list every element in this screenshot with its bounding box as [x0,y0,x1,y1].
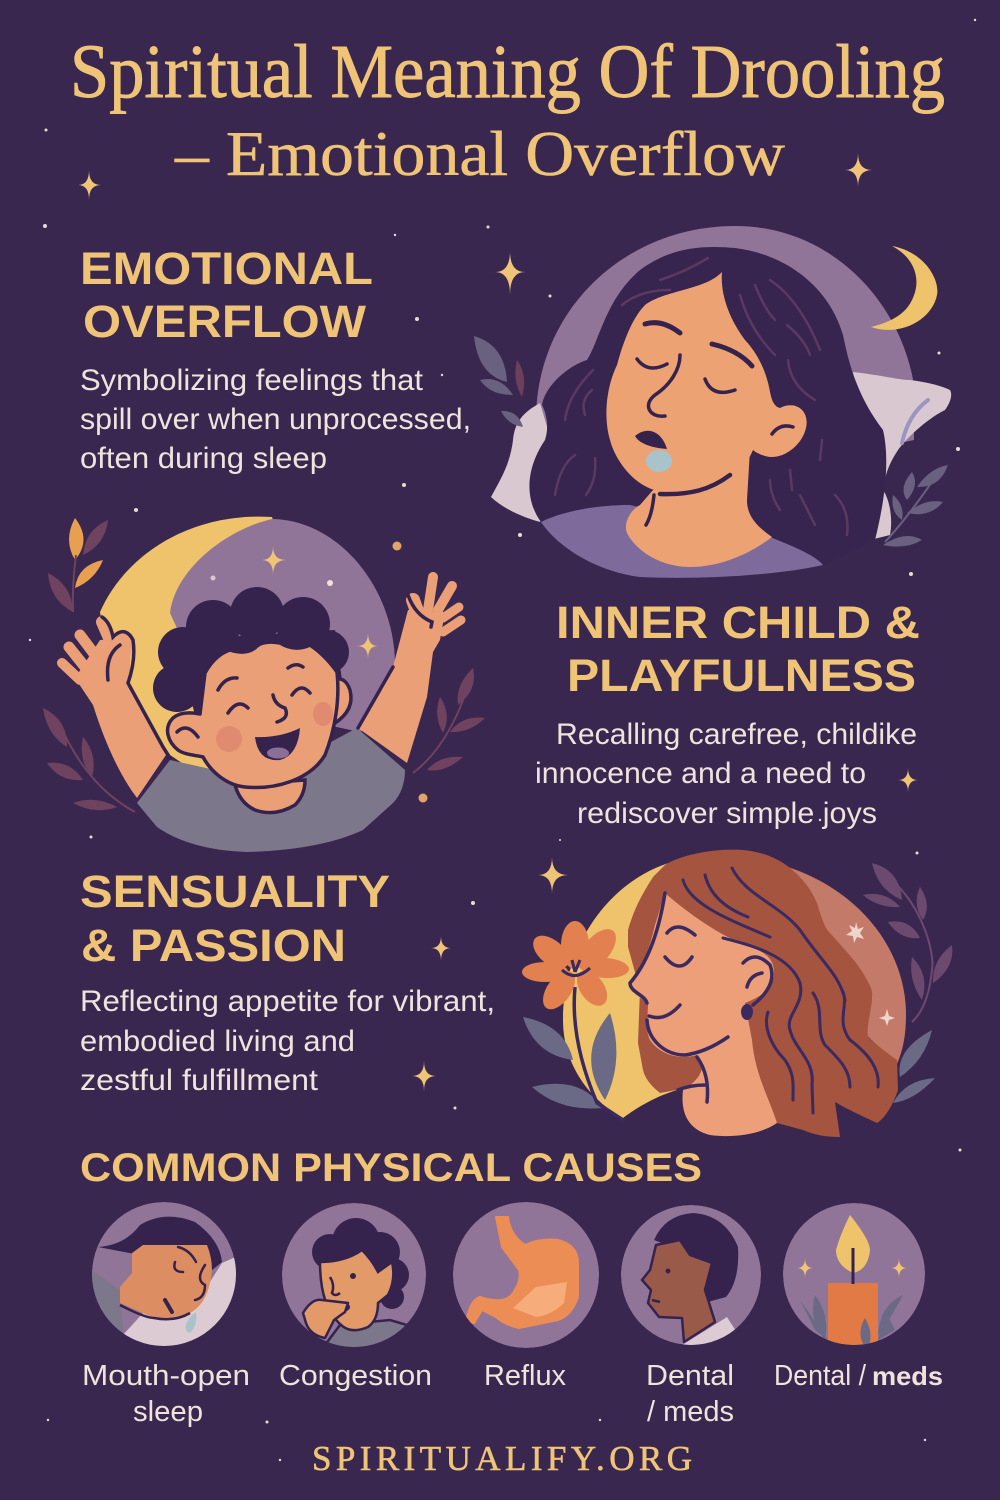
pillow crease [902,400,928,443]
heading: sensuality: & PASSION [81,920,346,971]
flower stem [574,987,623,1120]
labels: meds [872,1361,943,1391]
neck [626,450,772,567]
text: sensuality: zestful fulfillment [80,1064,319,1097]
child face [168,642,338,788]
labels: Congestion [279,1360,432,1392]
profile lines [630,893,772,1102]
sparkles [846,922,895,1026]
text: emotional overflow: often during sleep [80,442,327,475]
cheeks [216,702,333,752]
mouth [635,431,667,449]
sprigs [43,518,485,812]
icon: dental profile [621,1205,761,1347]
title: – Emotional Overflow [174,118,785,189]
heading: sensuality [80,866,390,971]
left sprig [474,336,524,427]
facial features [637,323,793,525]
earring [741,1004,753,1020]
left arm and hand [62,617,170,798]
right ear [332,679,351,723]
heading: inner child: INNER CHILD & [556,597,920,648]
text: inner child: Recalling carefree, childike [556,718,917,751]
moon disc [100,517,300,792]
purple sky [170,519,395,732]
icon: congestion [282,1203,426,1350]
tongue [267,748,289,758]
labels: Mouth-open [82,1360,250,1392]
text: inner child [535,718,917,830]
yellow moon [563,862,720,1118]
labels: Dental [646,1360,734,1392]
text: inner child: rediscover simple joys [577,797,877,830]
skin [629,893,777,1136]
shirt [541,505,823,578]
text: emotional overflow [80,364,471,475]
labels [82,1360,943,1428]
heading: sensuality: SENSUALITY [80,866,390,917]
face [606,272,807,492]
text: sensuality: Reflecting appetite for vibrant, [80,985,495,1018]
moon [871,246,937,330]
title [70,30,945,189]
title: Spiritual Meaning Of Drooling [70,30,945,114]
illustration: woman smelling flower [522,850,952,1137]
text: inner child: innocence and a need to [535,757,866,790]
heading: physical causes: COMMON PHYSICAL CAUSES [80,1146,702,1190]
neck [235,780,305,813]
text: sensuality: embodied living and [80,1025,355,1058]
left leaves [523,1013,616,1109]
heading: emotional overflow [80,243,373,347]
right sprig [883,465,948,547]
text: emotional overflow: spill over when unprocessed, [80,403,471,436]
icon: mouth-open sleep [85,1202,240,1350]
gold dots [392,542,428,802]
open mouth [255,728,300,760]
flower [522,921,629,1015]
hair [529,247,886,566]
shirt [137,728,405,852]
drool [646,450,672,472]
hair strands [555,258,848,535]
right arm and hand [358,577,461,763]
icon: candle [783,1203,925,1353]
heading: inner child: PLAYFULNESS [567,650,916,701]
right sprig [863,863,952,1103]
labels: Dental / [774,1360,867,1392]
sky stars [210,546,378,659]
pillow [491,372,951,540]
hair [628,850,898,1137]
heading: emotional overflow: EMOTIONAL [80,243,373,294]
text: emotional overflow: Symbolizing feelings that [80,364,424,397]
labels: Reflux [484,1360,566,1392]
hair strands [683,868,878,1113]
pink sky [785,866,906,1064]
gold sparkles [78,153,918,1091]
purple arc [536,226,914,520]
curly hair [153,587,349,715]
illustration: joyful child [43,517,485,852]
icon: reflux stomach [453,1202,599,1348]
labels: / meds [647,1396,734,1428]
heading: emotional overflow: OVERFLOW [83,296,367,347]
text: sensuality [80,985,495,1097]
illustration: sleeping woman [474,226,951,578]
heading: inner child [556,597,920,701]
child features [177,665,310,737]
labels: sleep [133,1396,203,1428]
footer: website: SPIRITUALIFY.ORG [312,1439,692,1478]
